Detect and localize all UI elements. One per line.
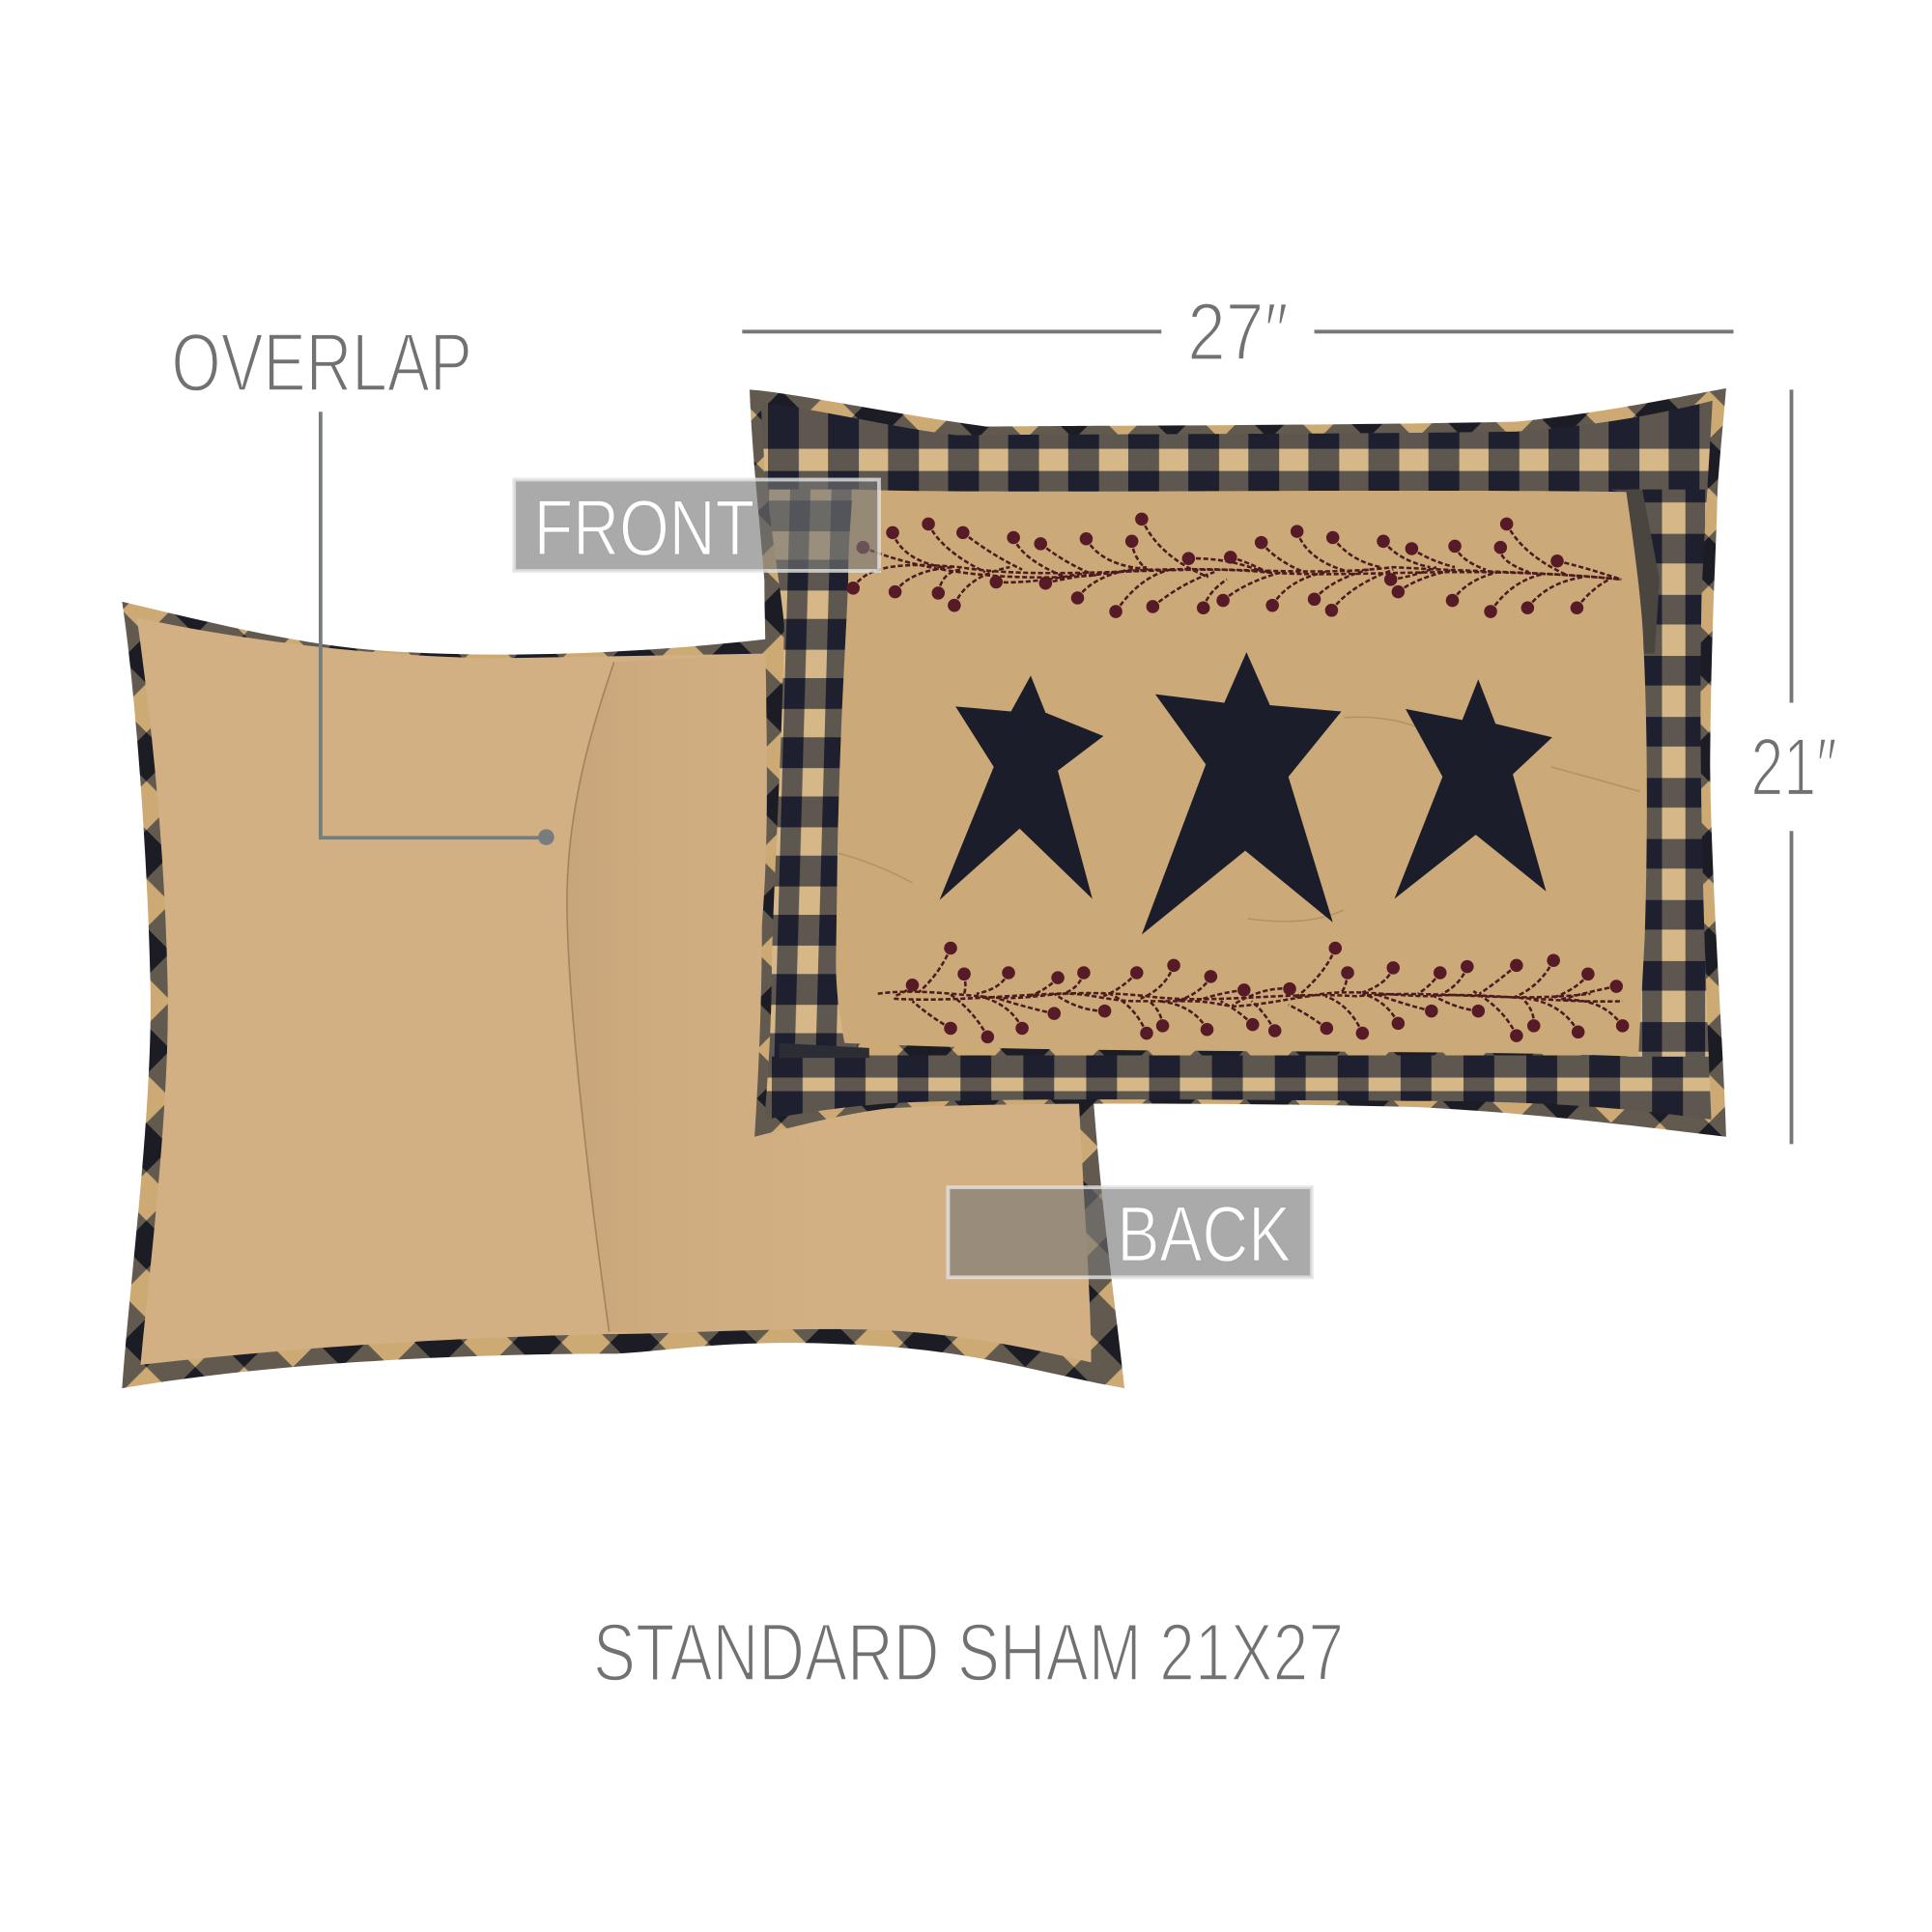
back pillow: checked flange — [122, 602, 1124, 1388]
star: right — [1395, 679, 1552, 898]
front pillow: quilting wrinkles — [838, 717, 1640, 922]
back pillow: overlap flap shading — [567, 653, 835, 1332]
label: BACK: BACK — [1117, 1191, 1291, 1279]
dimension: 21 inch height: 21″ — [1750, 722, 1837, 812]
callout: overlap leader line with dot — [321, 412, 554, 845]
back pillow sham — [122, 602, 1124, 1388]
dimension: 27 inch width: 27″ — [1187, 287, 1289, 378]
label: BACK — [948, 1187, 1312, 1279]
callout: OVERLAP label: OVERLAP — [171, 318, 472, 410]
front pillow: bias check flange — [750, 388, 1726, 1137]
front pillow sham — [740, 370, 1739, 1154]
back pillow: tan panel — [137, 617, 1092, 1365]
star: left — [940, 675, 1103, 900]
label: FRONT: FRONT — [534, 484, 754, 572]
embroidered vine: bottom — [878, 942, 1629, 1043]
front pillow: tan centre panel — [836, 490, 1647, 1057]
back pillow: overlap fold line — [567, 662, 614, 1331]
embroidered vine: top — [846, 513, 1621, 618]
star: middle — [1142, 652, 1342, 934]
caption: STANDARD SHAM 21X27 — [593, 1607, 1344, 1698]
front pillow: gingham border — [761, 400, 1713, 1120]
